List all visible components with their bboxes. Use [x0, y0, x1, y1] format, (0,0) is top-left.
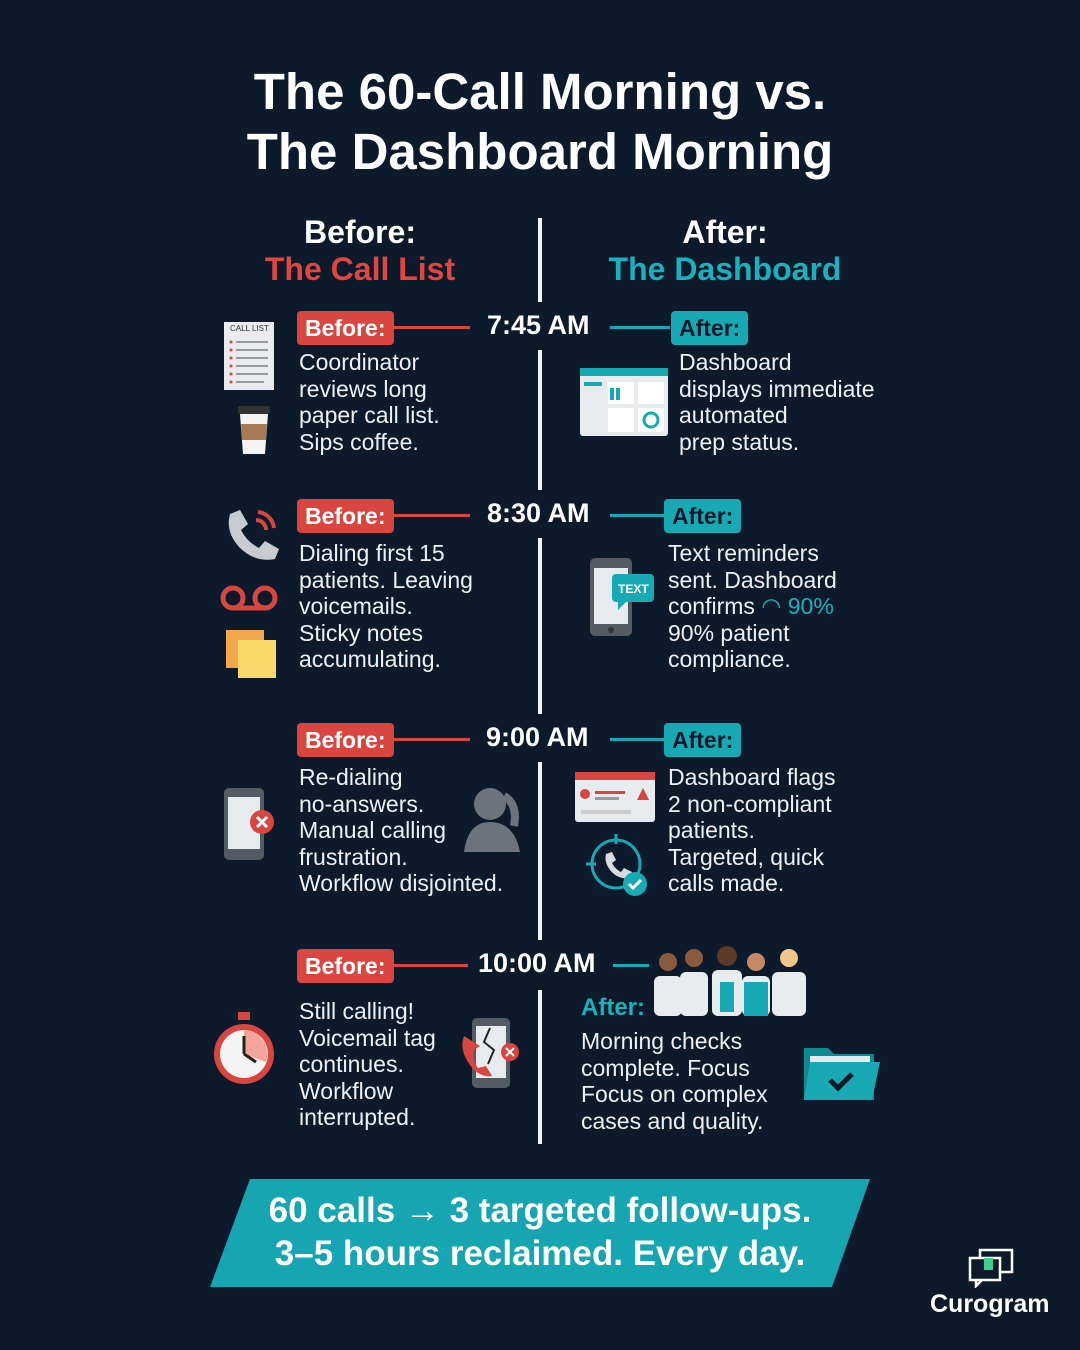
- before text: [299, 349, 440, 455]
- before text: frustration.: [299, 844, 408, 870]
- icon: coffee: [238, 406, 270, 454]
- icon: frustrated person: [464, 788, 520, 852]
- before text: [299, 764, 503, 896]
- after text: [668, 540, 837, 672]
- row 1: [224, 310, 875, 455]
- before text: Manual calling: [299, 817, 446, 843]
- after text: patients.: [668, 817, 755, 843]
- after text: [679, 349, 875, 455]
- icon: medical team: [654, 946, 806, 1016]
- after label: [664, 499, 741, 533]
- title: [247, 63, 833, 180]
- before text: no-answers.: [299, 791, 424, 817]
- icon: call list: CALL LIST: [230, 324, 269, 333]
- after label: After:: [672, 503, 733, 529]
- title: The Dashboard Morning: [247, 123, 833, 180]
- icon: dashboard: [580, 368, 668, 436]
- icon: phone error: [224, 788, 274, 860]
- before label: Before:: [305, 953, 386, 979]
- time: 7:45 AM: [487, 310, 590, 340]
- before text: accumulating.: [299, 646, 441, 672]
- before text: Coordinator: [299, 349, 419, 375]
- after text: 2 non-compliant: [668, 791, 832, 817]
- icon: targeted call: [586, 834, 647, 896]
- row 4: [214, 946, 880, 1134]
- after text: compliance.: [668, 646, 791, 672]
- time: 9:00 AM: [486, 722, 589, 752]
- after text: calls made.: [668, 870, 784, 896]
- after text: prep status.: [679, 429, 799, 455]
- before label: Before:: [305, 315, 386, 341]
- before label: Before:: [305, 503, 386, 529]
- after label: After:: [581, 994, 645, 1021]
- callout banner: 3–5 hours reclaimed. Every day.: [275, 1234, 805, 1273]
- before text: [299, 998, 436, 1130]
- after text: sent. Dashboard: [668, 567, 837, 593]
- after label: After:: [679, 315, 740, 341]
- before text: patients. Leaving: [299, 567, 473, 593]
- before label: Before:: [305, 727, 386, 753]
- before header: [265, 214, 455, 287]
- after header: After:: [682, 214, 768, 250]
- callout banner: [210, 1179, 870, 1287]
- after text: Targeted, quick: [668, 844, 824, 870]
- after text: Text reminders: [668, 540, 819, 566]
- after text: automated: [679, 402, 788, 428]
- after text: Dashboard: [679, 349, 792, 375]
- icon: sticky notes: [226, 630, 276, 678]
- title: The 60-Call Morning vs.: [254, 63, 826, 120]
- timeline vertical line: [538, 218, 542, 1144]
- logo: [930, 1248, 1049, 1318]
- before text: paper call list.: [299, 402, 440, 428]
- before text: voicemails.: [299, 593, 413, 619]
- icon: chat bubbles: [968, 1248, 1014, 1288]
- row 2: [220, 498, 837, 678]
- icon: stopwatch: [214, 1012, 274, 1084]
- callout banner: 60 calls → 3 targeted follow-ups.: [269, 1191, 811, 1230]
- after header: The Dashboard: [609, 251, 841, 287]
- after header: [608, 214, 841, 287]
- before text: Still calling!: [299, 998, 414, 1024]
- after label: [664, 723, 741, 757]
- before label: [297, 499, 394, 533]
- before text: Re-dialing: [299, 764, 403, 790]
- after text: cases and quality.: [581, 1108, 763, 1134]
- after text: Dashboard flags: [668, 764, 836, 790]
- icon: phone with text: TEXT: [618, 582, 649, 596]
- time: 8:30 AM: [487, 498, 590, 528]
- before label: [297, 949, 394, 983]
- icon: call list: [224, 322, 274, 390]
- after text: complete. Focus: [581, 1055, 750, 1081]
- before text: Dialing first 15: [299, 540, 445, 566]
- time: 10:00 AM: [478, 948, 596, 978]
- icon: phone with text: [590, 558, 654, 636]
- before text: Workflow: [299, 1078, 393, 1104]
- before text: Voicemail tag: [299, 1025, 436, 1051]
- after text: Morning checks: [581, 1028, 742, 1054]
- before label: [297, 723, 394, 757]
- logo: Curogram: [930, 1290, 1049, 1318]
- icon: phone: [228, 510, 279, 560]
- after label: After:: [672, 727, 733, 753]
- before text: Sips coffee.: [299, 429, 419, 455]
- icon: voicemail: [220, 586, 278, 610]
- before header: Before:: [304, 214, 416, 250]
- before header: The Call List: [265, 251, 455, 287]
- after text: confirms ◠ 90%: [668, 593, 834, 619]
- after text: displays immediate: [679, 376, 875, 402]
- before text: [299, 540, 473, 672]
- before label: [297, 311, 394, 345]
- after label: [671, 311, 748, 345]
- before text: continues.: [299, 1051, 404, 1077]
- row 3: [224, 722, 836, 896]
- icon: folder check: [804, 1048, 880, 1100]
- after text: [581, 1028, 768, 1134]
- before text: Workflow disjointed.: [299, 870, 503, 896]
- after text: Focus on complex: [581, 1081, 768, 1107]
- icon: dashboard flags: [575, 772, 655, 822]
- after text: [668, 764, 836, 896]
- before text: reviews long: [299, 376, 427, 402]
- icon: broken phone: [462, 1018, 519, 1088]
- after text: 90% patient: [668, 620, 789, 646]
- before text: interrupted.: [299, 1104, 415, 1130]
- before text: Sticky notes: [299, 620, 423, 646]
